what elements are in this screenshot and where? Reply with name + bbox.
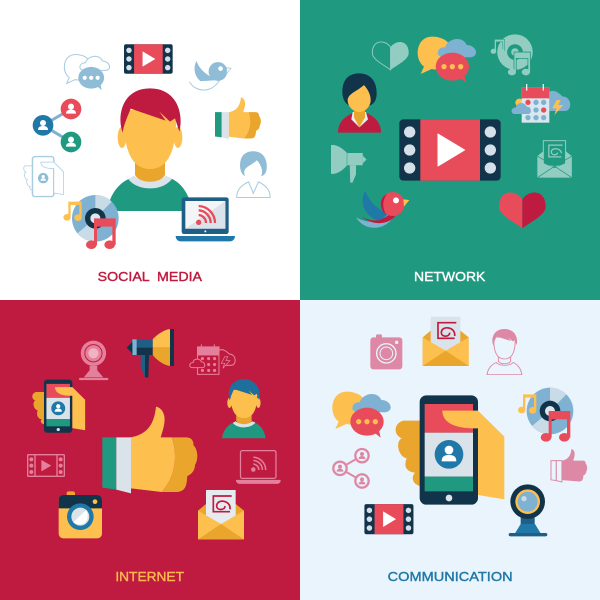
icon: film strip: [124, 44, 173, 74]
icon: music disc: [518, 388, 573, 442]
panel: network: [300, 0, 600, 300]
icon: laptop with wifi: [176, 197, 235, 241]
icon: thumbs up pink: [551, 449, 587, 482]
icon: webcam: [509, 484, 547, 536]
icon: bird colored: [356, 191, 409, 228]
icon: thumbs up: [215, 97, 261, 139]
icon: woman: [338, 73, 381, 133]
icon: music disc: [63, 195, 119, 249]
heading: internet: INTERNET: [115, 569, 184, 584]
icon: heart red: [499, 193, 546, 228]
icon: share pink: [333, 449, 369, 488]
panel: internet: [0, 300, 300, 600]
icon: envelope: [423, 317, 469, 366]
icon: bird light: [189, 61, 231, 90]
icon: calendar outline: [190, 344, 235, 374]
heading: social media: SOCIAL MEDIA: [98, 269, 202, 284]
icon: laptop outline: [236, 451, 281, 484]
icon: envelope light: [537, 141, 572, 178]
icon: yellow note: [63, 202, 82, 221]
icon: chat bubbles: [418, 37, 476, 83]
panel: communication: [300, 300, 600, 600]
panel: social media: [0, 0, 300, 300]
heading: network: NETWORK: [414, 269, 485, 284]
icon: chat bubbles outline: [64, 54, 110, 90]
icon: phone in hand: [32, 380, 85, 433]
icon: person with red hair: [107, 88, 192, 211]
icon: man outline: [487, 329, 522, 375]
icon: webcam outline: [79, 341, 108, 380]
icon: megaphone: [127, 329, 174, 377]
icon: megaphone light: [331, 145, 366, 183]
icon: share network: [33, 99, 81, 152]
heading: communication: COMMUNICATION: [388, 569, 513, 584]
icon: calendar with weather: [512, 84, 570, 123]
icon: film strip large: [399, 119, 501, 181]
icon: phone in hand large: [396, 395, 504, 505]
icon: camera: [59, 491, 102, 538]
icon: film strip: [364, 504, 413, 534]
icon: red note: [86, 218, 116, 249]
icon: phone in hand outline: [24, 157, 63, 197]
icon: camera pink: [370, 334, 402, 369]
icon: chat bubbles: [332, 392, 391, 438]
icon: envelope: [198, 490, 244, 539]
icon: man with blue hair: [222, 379, 266, 438]
icon: half heart: [372, 42, 409, 70]
icon: thumbs up large: [102, 407, 197, 493]
icon: woman outline: [237, 151, 270, 197]
icon: film strip outline: [28, 455, 64, 476]
icon: music disc light: [491, 34, 533, 75]
